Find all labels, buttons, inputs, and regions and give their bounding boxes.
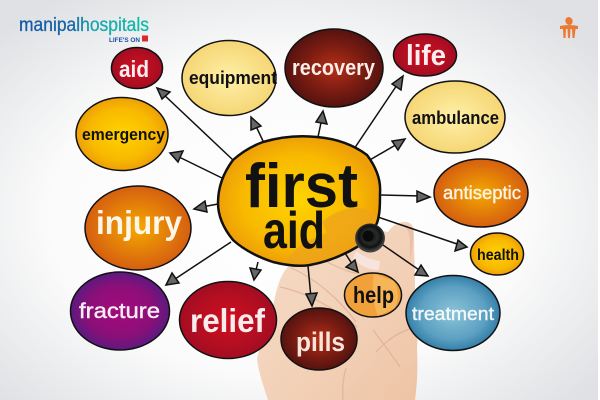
arrow: relief (250, 262, 261, 280)
bubble: emergency: emergency (82, 125, 165, 144)
bubble: health (470, 233, 524, 275)
central bubble: first aid (218, 136, 380, 266)
bubble: aid: aid (119, 56, 149, 82)
arrow: injury (194, 201, 218, 212)
bubble: recovery (285, 29, 383, 107)
arrow: recovery (316, 111, 327, 137)
logo: Manipal Hospitals (19, 14, 149, 44)
arrow: fracture (166, 242, 231, 285)
bubble: ambulance (405, 81, 505, 153)
bubble: pills (281, 308, 357, 370)
logo: Manipal Hospitals: LIFE'S ON (109, 37, 140, 44)
bubble: help (344, 273, 402, 317)
central bubble: first aid: aid (263, 202, 325, 260)
bubble: fracture (70, 272, 170, 350)
bubble: antiseptic: antiseptic (443, 183, 521, 203)
logo: Manipal Hospitals: manipalhospitals (19, 14, 149, 36)
hand holding marker (257, 222, 417, 400)
central bubble: first aid: first (245, 152, 358, 221)
bubble: equipment (182, 40, 277, 116)
arrow: emergency (170, 151, 222, 178)
bubble: antiseptic (434, 159, 528, 227)
arrow: antiseptic (381, 191, 430, 202)
arrow: life (354, 76, 403, 149)
bubble: help: help (353, 282, 394, 308)
bubble: equipment: equipment (189, 68, 277, 88)
bubble: fracture: fracture (79, 300, 160, 323)
bubble: emergency (76, 98, 168, 170)
arrow: pills (306, 266, 317, 306)
bubble: ambulance: ambulance (412, 108, 499, 128)
marker tip (355, 224, 385, 252)
bubble: pills: pills (296, 327, 345, 357)
bubble: life (394, 34, 456, 76)
bubble: injury (85, 186, 191, 270)
arrows from centre to each bubble (157, 76, 467, 306)
bubble: health: health (477, 247, 519, 264)
bubble: relief: relief (190, 302, 266, 339)
bubble: aid (112, 48, 162, 88)
bubble: treatment: treatment (412, 304, 494, 324)
arrow: ambulance (368, 139, 405, 161)
bubble: recovery: recovery (292, 55, 376, 80)
icon: orange figure at desk (560, 16, 578, 38)
bubble: life: life (406, 40, 446, 72)
bubble: injury: injury (96, 204, 183, 241)
bubble: relief (180, 282, 276, 358)
arrow: treatment (370, 236, 428, 276)
arrow: health (378, 217, 467, 251)
bubble: treatment (406, 276, 500, 350)
arrow: equipment (251, 117, 263, 141)
arrow: help (345, 253, 358, 272)
arrow: aid (157, 88, 233, 160)
